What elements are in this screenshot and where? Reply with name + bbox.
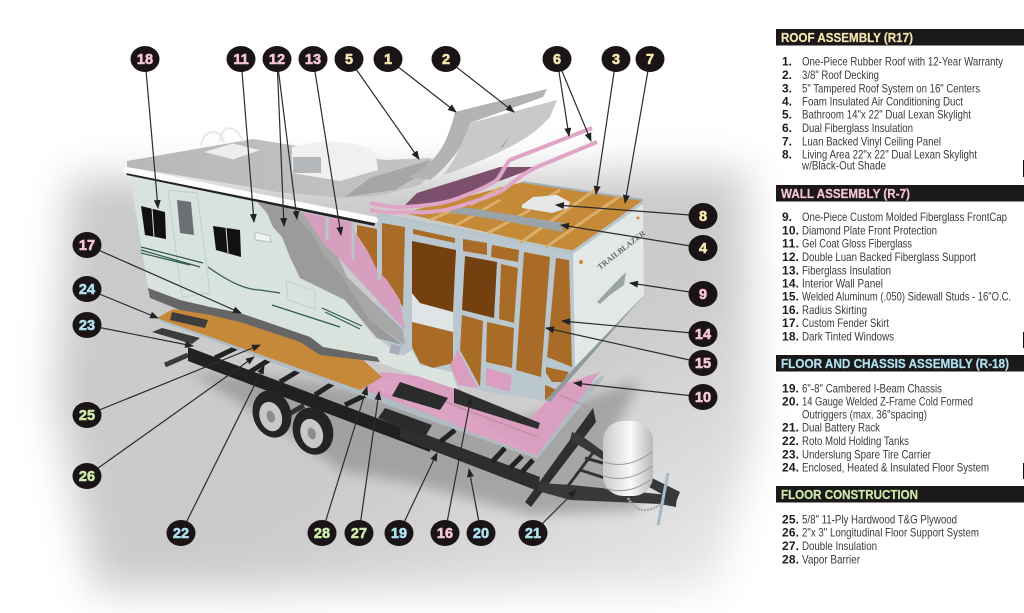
chassis frame bbox=[165, 346, 680, 507]
legend: floor construction: 25. bbox=[782, 512, 799, 526]
legend: wall assembly: 12. bbox=[782, 250, 799, 264]
lifted roof layers bbox=[370, 89, 597, 213]
legend: wall assembly: Interior Wall Panel bbox=[802, 276, 883, 290]
plywood floor bbox=[157, 309, 382, 390]
legend: floor and chassis assembly: 20. bbox=[782, 395, 799, 409]
numbered callout badges: 14 bbox=[695, 327, 711, 343]
legend: floor and chassis assembly: 24. bbox=[782, 461, 799, 475]
numbered callout badges: 17 bbox=[79, 238, 95, 254]
legend: roof assembly: Living Area 22"x 22" Dual Lexan Skylight bbox=[802, 148, 978, 162]
numbered callout badges: 22 bbox=[173, 526, 189, 542]
numbered callout badges: 24 bbox=[79, 282, 95, 298]
numbered callout badges: 26 bbox=[79, 469, 95, 485]
legend: wall assembly: Custom Fender Skirt bbox=[802, 316, 890, 330]
legend: wall assembly: Dark Tinted Windows bbox=[802, 329, 894, 343]
legend: wall assembly: 16. bbox=[782, 303, 799, 317]
numbered callout badges: 27 bbox=[351, 526, 367, 542]
legend: roof assembly: 3/8" Roof Decking bbox=[802, 68, 879, 82]
numbered callout badges: 1 bbox=[384, 52, 392, 68]
legend: roof assembly: 7. bbox=[782, 134, 792, 148]
awning rail bbox=[126, 170, 375, 223]
legend: roof assembly: Luan Backed Vinyl Ceiling Panel bbox=[802, 134, 941, 148]
legend: floor and chassis assembly: 14 Gauge Welded Z-Frame Cold Formed bbox=[802, 395, 973, 409]
legend: floor construction: Vapor Barrier bbox=[802, 552, 860, 566]
legend: floor and chassis assembly: Roto Mold Holding Tanks bbox=[802, 434, 909, 448]
rubber roof and decking sheets bbox=[408, 89, 547, 180]
numbered callout badges: 19 bbox=[391, 526, 407, 542]
legend: roof assembly: 4. bbox=[782, 95, 792, 109]
numbered callout badges: 6 bbox=[553, 52, 561, 68]
legend: wall assembly: 18. bbox=[782, 329, 799, 343]
numbered callout badges: 8 bbox=[699, 209, 707, 225]
numbered callout badges: 25 bbox=[79, 408, 95, 424]
legend: roof assembly: 5" Tampered Roof System on 16" Centers bbox=[802, 81, 980, 95]
numbered callout badges: 15 bbox=[695, 356, 711, 372]
numbered callout badges bbox=[72, 46, 718, 546]
legend: floor and chassis assembly: 22. bbox=[782, 434, 799, 448]
legend: roof assembly: 5. bbox=[782, 108, 792, 122]
legend: wall assembly: Diamond Plate Front Protection bbox=[802, 223, 937, 237]
legend: wall assembly: 11. bbox=[782, 237, 799, 251]
cut fibreglass layers bbox=[257, 202, 405, 345]
wall heading bbox=[776, 185, 1024, 202]
numbered callout badges: 3 bbox=[612, 52, 620, 68]
floor edge and pink insulation bbox=[157, 310, 604, 459]
numbered callout badges: 5 bbox=[345, 52, 353, 68]
legend: floor construction: 28. bbox=[782, 552, 799, 566]
entry steps bbox=[152, 312, 448, 437]
legend: floor and chassis assembly: 6"-8" Cambered I-Beam Chassis bbox=[802, 381, 942, 395]
legend: roof assembly: w/Black-Out Shade bbox=[801, 159, 886, 173]
roof with vent and skylight bbox=[127, 128, 440, 198]
legend: wall assembly: Gel Coat Gloss Fiberglass bbox=[802, 237, 912, 251]
legend: roof assembly: 1. bbox=[782, 55, 792, 69]
numbered callout badges: 13 bbox=[305, 52, 321, 68]
roof heading: ROOF ASSEMBLY (R17) bbox=[781, 31, 913, 45]
legend: floor and chassis assembly bbox=[776, 355, 1024, 475]
legend: floor and chassis assembly: Underslung Spare Tire Carrier bbox=[802, 447, 931, 461]
ceiling with rafters bbox=[377, 182, 643, 252]
floor construction heading bbox=[776, 486, 1024, 502]
legend: wall assembly: Double Luan Backed Fiberglass Support bbox=[802, 250, 977, 264]
side wall exterior bbox=[130, 176, 380, 362]
legend: floor construction: 2"x 3" Longitudinal Floor Support System bbox=[802, 526, 979, 540]
legend: floor construction: 5/8" 11-Ply Hardwood T&G Plywood bbox=[802, 512, 957, 526]
floor construction heading: FLOOR CONSTRUCTION bbox=[781, 488, 918, 502]
wood wall panels bbox=[357, 223, 572, 400]
legend: floor construction bbox=[776, 486, 1024, 566]
legend: wall assembly: Radius Skirting bbox=[802, 303, 867, 317]
legend: wall assembly: 17. bbox=[782, 316, 799, 330]
trailer cutaway illustration bbox=[126, 89, 680, 525]
legend: floor and chassis assembly: 19. bbox=[782, 381, 799, 395]
wall framing bbox=[357, 214, 576, 402]
cast shadow under trailer bbox=[190, 372, 640, 515]
numbered callout badges: 16 bbox=[437, 526, 453, 542]
legend: roof assembly: 6. bbox=[782, 121, 792, 135]
legend: roof assembly bbox=[776, 29, 1024, 173]
legend: floor construction: Double Insulation bbox=[802, 539, 877, 553]
legend: wall assembly: 10. bbox=[782, 223, 799, 237]
pink wall insulation and studs bbox=[302, 212, 405, 330]
legend: roof assembly: 2. bbox=[782, 68, 792, 82]
decal stripes bbox=[141, 247, 362, 329]
legend: floor and chassis assembly: Dual Battery Rack bbox=[802, 421, 881, 435]
numbered callout badges: 12 bbox=[269, 52, 285, 68]
legend: wall assembly: Fiberglass Insulation bbox=[802, 263, 891, 277]
numbered callout badges: 20 bbox=[473, 526, 489, 542]
legend: roof assembly: Foam Insulated Air Conditioning Duct bbox=[802, 95, 964, 109]
legend: roof assembly: Dual Fiberglass Insulation bbox=[802, 121, 913, 135]
numbered callout badges: 21 bbox=[525, 526, 541, 542]
legend: floor and chassis assembly: 21. bbox=[782, 421, 799, 435]
wheels bbox=[247, 385, 339, 460]
legend: floor construction: 26. bbox=[782, 526, 799, 540]
ground shadow backdrop bbox=[55, 170, 755, 590]
legend: roof assembly: Bathroom 14"x 22" Dual Lexan Skylight bbox=[802, 108, 972, 122]
numbered callout badges: 7 bbox=[646, 52, 654, 68]
front cap bbox=[546, 202, 647, 402]
legend: wall assembly: 13. bbox=[782, 263, 799, 277]
legend: wall assembly: 9. bbox=[782, 210, 792, 224]
legend: floor and chassis assembly: 23. bbox=[782, 447, 799, 461]
legend: wall assembly bbox=[776, 185, 1024, 343]
numbered callout badges: 2 bbox=[442, 52, 450, 68]
propane tank, chain and jack bbox=[603, 421, 668, 525]
legend: roof assembly: 3. bbox=[782, 81, 792, 95]
legend: floor and chassis assembly: Outriggers (max. 36"spacing) bbox=[802, 408, 927, 422]
numbered callout badges: 11 bbox=[233, 52, 249, 68]
leader arrows bbox=[87, 59, 703, 533]
front cap: TRAILBLAZER bbox=[596, 228, 647, 272]
numbered callout badges: 10 bbox=[695, 390, 711, 406]
wall heading: WALL ASSEMBLY (R-7) bbox=[781, 187, 910, 201]
legend: floor construction: 27. bbox=[782, 539, 799, 553]
legend: roof assembly: 8. bbox=[782, 148, 792, 162]
numbered callout badges: 28 bbox=[314, 526, 330, 542]
chassis heading: FLOOR AND CHASSIS ASSEMBLY (R-18) bbox=[781, 357, 1009, 371]
numbered callout badges: 18 bbox=[137, 52, 153, 68]
numbered callout badges: 9 bbox=[699, 287, 707, 303]
numbered callout badges: 23 bbox=[79, 318, 95, 334]
legend: wall assembly: 15. bbox=[782, 290, 799, 304]
insulation layers bbox=[370, 128, 597, 213]
legend: wall assembly: 14. bbox=[782, 276, 799, 290]
windows and door bbox=[141, 190, 315, 309]
lower wall and skirting bbox=[377, 338, 540, 429]
roof heading bbox=[776, 29, 1024, 46]
numbered callout badges: 4 bbox=[699, 241, 707, 257]
